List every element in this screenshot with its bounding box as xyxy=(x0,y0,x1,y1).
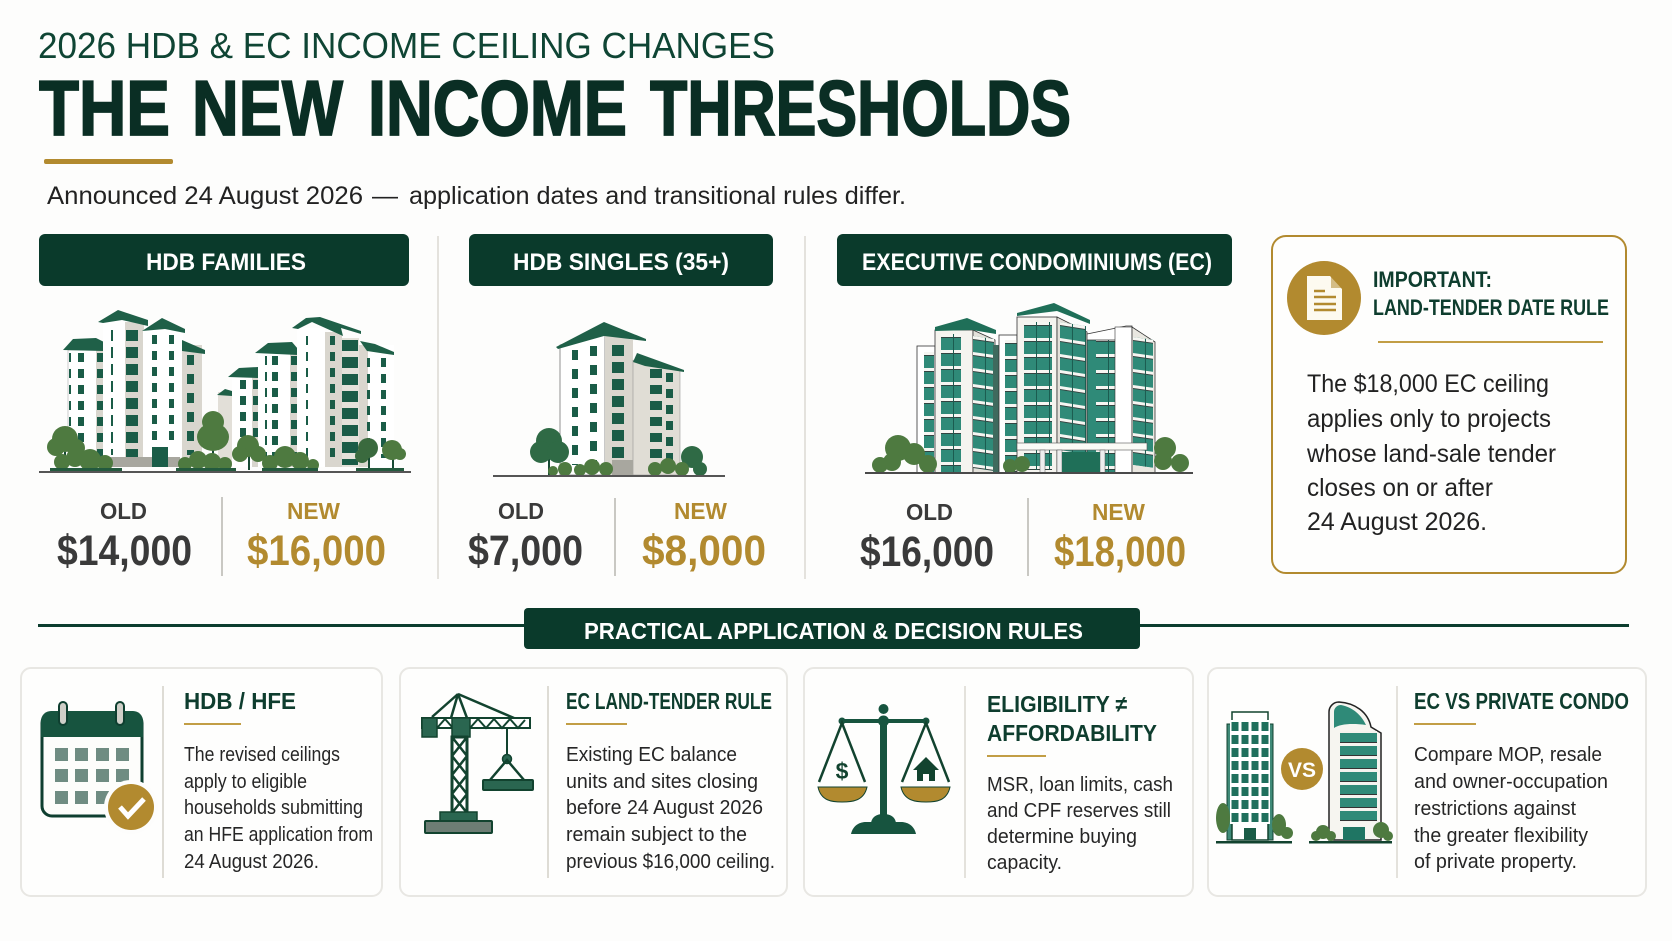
new ceiling: families xyxy=(247,498,386,575)
card body xyxy=(987,774,1173,874)
new ceiling: singles xyxy=(642,498,766,575)
header: HDB families xyxy=(39,234,409,286)
header: executive condominiums xyxy=(837,234,1232,286)
new ceiling: singles: NEW xyxy=(674,498,727,524)
card body: before 24 August 2026 xyxy=(566,797,763,819)
new ceiling: families: NEW xyxy=(287,498,340,524)
card body: determine buying xyxy=(987,826,1137,848)
header: executive condominiums: EXECUTIVE CONDOMINIUMS (EC) xyxy=(862,249,1212,276)
card body: and owner-occupation xyxy=(1414,771,1608,793)
card body: the greater flexibility xyxy=(1414,825,1588,847)
card body: an HFE application from xyxy=(184,824,373,846)
VS badge: VS xyxy=(1288,759,1316,782)
VS badge xyxy=(1281,748,1323,790)
icon: EC tower vs private condo xyxy=(1216,702,1393,844)
callout heading: LAND-TENDER DATE RULE xyxy=(1373,295,1609,320)
new ceiling: EC: $18,000 xyxy=(1054,528,1186,576)
old ceiling: singles: OLD xyxy=(498,498,544,524)
card title: EC VS PRIVATE CONDO xyxy=(1414,688,1629,714)
old ceiling: EC xyxy=(860,499,994,576)
card body: MSR, loan limits, cash xyxy=(987,774,1173,796)
callout heading xyxy=(1373,267,1609,320)
section banner xyxy=(524,608,1140,649)
card: EC vs private condo xyxy=(1208,668,1646,896)
card body: apply to eligible xyxy=(184,771,307,793)
card body: households submitting xyxy=(184,797,363,819)
dollar sign: $ xyxy=(836,758,849,784)
new ceiling: singles: $8,000 xyxy=(642,527,766,575)
card title: EC LAND-TENDER RULE xyxy=(566,688,772,714)
callout body xyxy=(1306,370,1556,536)
callout: important land-tender date rule xyxy=(1272,236,1626,573)
announcement line: application dates and transitional rules differ. xyxy=(409,182,906,210)
card body: restrictions against xyxy=(1414,798,1576,820)
new ceiling: EC: NEW xyxy=(1092,499,1145,525)
card: EC land-tender rule xyxy=(400,668,787,896)
icon: tower crane xyxy=(422,694,533,833)
card body: previous $16,000 ceiling. xyxy=(566,851,775,873)
panel: executive condominiums xyxy=(837,234,1232,576)
icon: balance scale xyxy=(818,704,950,834)
header: HDB singles xyxy=(469,234,773,286)
callout body: 24 August 2026. xyxy=(1307,508,1487,536)
new ceiling: EC xyxy=(1054,499,1186,576)
card body: Existing EC balance xyxy=(566,744,737,766)
card title: AFFORDABILITY xyxy=(987,720,1157,746)
card body: and CPF reserves still xyxy=(987,800,1171,822)
card body: of private property. xyxy=(1414,851,1577,873)
old ceiling: families xyxy=(57,498,192,575)
illustration: HDB blocks xyxy=(39,310,411,473)
card body xyxy=(184,744,373,873)
section rule xyxy=(38,624,1629,627)
callout body: whose land-sale tender xyxy=(1306,440,1556,468)
main title: NEW xyxy=(192,64,343,152)
gold accent rule xyxy=(44,159,173,164)
old ceiling: EC: $16,000 xyxy=(860,528,994,576)
illustration: HDB single block xyxy=(493,322,725,477)
main title: INCOME xyxy=(368,64,627,152)
card title: HDB / HFE xyxy=(184,688,296,714)
header: HDB families: HDB FAMILIES xyxy=(146,249,306,276)
main title: THRESHOLDS xyxy=(650,64,1071,152)
panel: HDB families xyxy=(39,234,411,576)
subtitle heading: 2026 HDB & EC INCOME CEILING CHANGES xyxy=(38,25,775,66)
card body: Compare MOP, resale xyxy=(1414,744,1602,766)
old ceiling: EC: OLD xyxy=(906,499,953,525)
announcement line: Announced 24 August 2026 xyxy=(47,182,363,210)
icon: calendar with check xyxy=(41,702,158,834)
announcement line xyxy=(47,182,906,210)
main title: THE xyxy=(39,64,170,152)
card body: remain subject to the xyxy=(566,824,747,846)
card title: ELIGIBILITY ≠ xyxy=(987,691,1127,717)
card: eligibility vs affordability xyxy=(804,668,1193,896)
old ceiling: families: $14,000 xyxy=(57,527,192,575)
illustration: EC towers xyxy=(865,303,1193,474)
callout heading: IMPORTANT: xyxy=(1373,267,1492,292)
card body xyxy=(566,744,775,873)
icon: document xyxy=(1287,261,1361,335)
section banner: PRACTICAL APPLICATION & DECISION RULES xyxy=(584,618,1083,644)
main title xyxy=(39,64,1071,152)
column dividers xyxy=(438,236,805,579)
card body: The revised ceilings xyxy=(184,744,340,766)
announcement line: — xyxy=(372,182,398,210)
callout body: applies only to projects xyxy=(1307,405,1551,433)
card body: 24 August 2026. xyxy=(184,851,319,873)
old ceiling: families: OLD xyxy=(100,498,147,524)
card: HDB / HFE xyxy=(21,668,382,896)
old ceiling: singles: $7,000 xyxy=(468,527,583,575)
header: HDB singles: HDB SINGLES (35+) xyxy=(513,249,729,276)
callout body: The $18,000 EC ceiling xyxy=(1307,370,1549,398)
callout body: closes on or after xyxy=(1307,474,1493,502)
card body xyxy=(1414,744,1608,873)
old ceiling: singles xyxy=(468,498,583,575)
card body: capacity. xyxy=(987,852,1062,874)
new ceiling: families: $16,000 xyxy=(247,527,386,575)
card body: units and sites closing xyxy=(566,771,758,793)
panel: HDB singles xyxy=(468,234,773,576)
card title xyxy=(987,691,1157,746)
